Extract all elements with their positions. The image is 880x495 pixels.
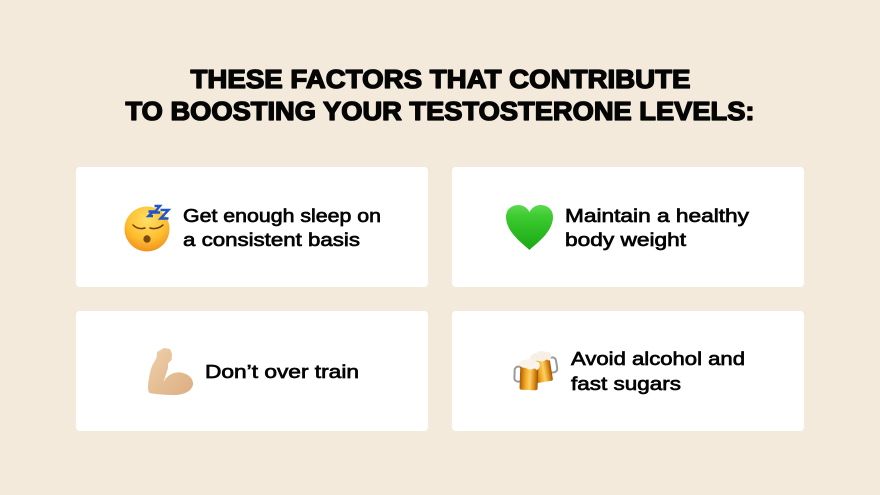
text: sleep: a consistent basis	[183, 229, 360, 250]
icon: right mug	[529, 349, 559, 384]
text: alcohol: Avoid alcohol and	[571, 348, 745, 369]
text: weight	[565, 205, 750, 250]
title	[126, 66, 754, 126]
panel: weight	[452, 167, 804, 287]
icon: clinking beer mugs	[514, 349, 559, 390]
text: weight: Maintain a healthy	[565, 205, 750, 226]
panel: sleep	[76, 167, 428, 287]
panel: training	[76, 311, 428, 431]
text: sleep: Get enough sleep on	[183, 205, 381, 226]
icon: flexed biceps	[148, 348, 193, 395]
text: training: Don’t over train	[205, 361, 359, 382]
text: sleep	[183, 205, 381, 250]
title: THESE FACTORS THAT CONTRIBUTE	[190, 66, 690, 94]
icon: sleeping face	[124, 206, 170, 252]
icon: left mug	[514, 358, 540, 390]
panel: alcohol	[452, 311, 804, 431]
text: alcohol: fast sugars	[571, 373, 681, 394]
text: weight: body weight	[565, 229, 686, 250]
icon: green heart	[506, 205, 553, 250]
text: alcohol	[571, 348, 745, 394]
title: TO BOOSTING YOUR TESTOSTERONE LEVELS:	[126, 98, 754, 126]
